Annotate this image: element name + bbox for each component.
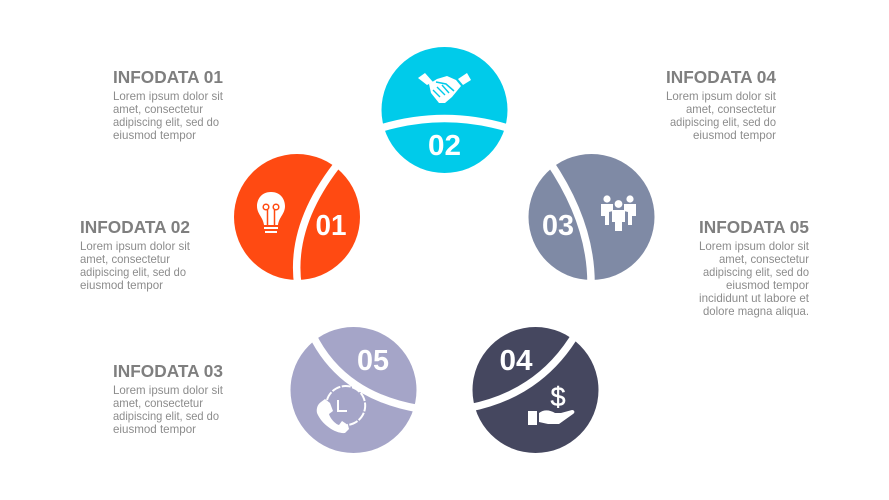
circle 04: navy money hand: [469, 327, 598, 453]
icon: handshake: [418, 73, 471, 103]
text block: INFODATA 05: dolore magna aliqua.: [703, 304, 809, 318]
text block: INFODATA 05: [699, 217, 810, 318]
icon: lightbulb: [257, 192, 285, 232]
text block: INFODATA 03: Lorem ipsum dolor sit: [113, 383, 224, 397]
text block: INFODATA 04: eiusmod tempor: [693, 128, 776, 142]
text block: INFODATA 01: amet, consectetur: [113, 102, 203, 116]
text block: INFODATA 05: Lorem ipsum dolor sit: [699, 239, 810, 253]
text block: INFODATA 04: adipiscing elit, sed do: [670, 115, 776, 129]
text block: INFODATA 05: adipiscing elit, sed do: [703, 265, 809, 279]
text block: INFODATA 03: INFODATA 03: [113, 361, 223, 381]
text block: INFODATA 03: amet, consectetur: [113, 396, 203, 410]
text block: INFODATA 02: [80, 217, 191, 292]
text block: INFODATA 04: Lorem ipsum dolor sit: [666, 89, 777, 103]
circle 03: slate people: [528, 154, 654, 286]
text block: INFODATA 03: [113, 361, 224, 436]
icon: hand holding dollar: $: [550, 382, 566, 412]
icon: people: [601, 195, 636, 231]
text block: INFODATA 03: eiusmod tempor: [113, 422, 196, 436]
text block: INFODATA 05: eiusmod tempor: [726, 278, 809, 292]
text block: INFODATA 02: INFODATA 02: [80, 217, 190, 237]
text block: INFODATA 02: amet, consectetur: [80, 252, 170, 266]
number 05: 05: [357, 345, 389, 377]
circle 01: orange lightbulb: [234, 154, 360, 286]
icon: phone and clock: [317, 386, 365, 433]
text block: INFODATA 01: INFODATA 01: [113, 67, 223, 87]
number 03: 03: [542, 210, 574, 242]
text block: INFODATA 04: amet, consectetur: [686, 102, 776, 116]
text block: INFODATA 02: eiusmod tempor: [80, 278, 163, 292]
text block: INFODATA 05: INFODATA 05: [699, 217, 809, 237]
circle 05: lavender phone clock: [290, 327, 420, 453]
text block: INFODATA 01: Lorem ipsum dolor sit: [113, 89, 224, 103]
text block: INFODATA 02: adipiscing elit, sed do: [80, 265, 186, 279]
text block: INFODATA 01: adipiscing elit, sed do: [113, 115, 219, 129]
text block: INFODATA 01: [113, 67, 224, 142]
number 01: 01: [316, 210, 346, 242]
text block: INFODATA 05: incididunt ut labore et: [699, 291, 810, 305]
circle 02: cyan handshake: [378, 47, 511, 173]
text block: INFODATA 03: adipiscing elit, sed do: [113, 409, 219, 423]
text block: INFODATA 01: eiusmod tempor: [113, 128, 196, 142]
text block: INFODATA 04: INFODATA 04: [666, 67, 776, 87]
text block: INFODATA 04: [666, 67, 777, 142]
number 02: 02: [428, 130, 461, 162]
number 04: 04: [500, 345, 532, 377]
text block: INFODATA 05: amet, consectetur: [719, 252, 809, 266]
text block: INFODATA 02: Lorem ipsum dolor sit: [80, 239, 191, 253]
